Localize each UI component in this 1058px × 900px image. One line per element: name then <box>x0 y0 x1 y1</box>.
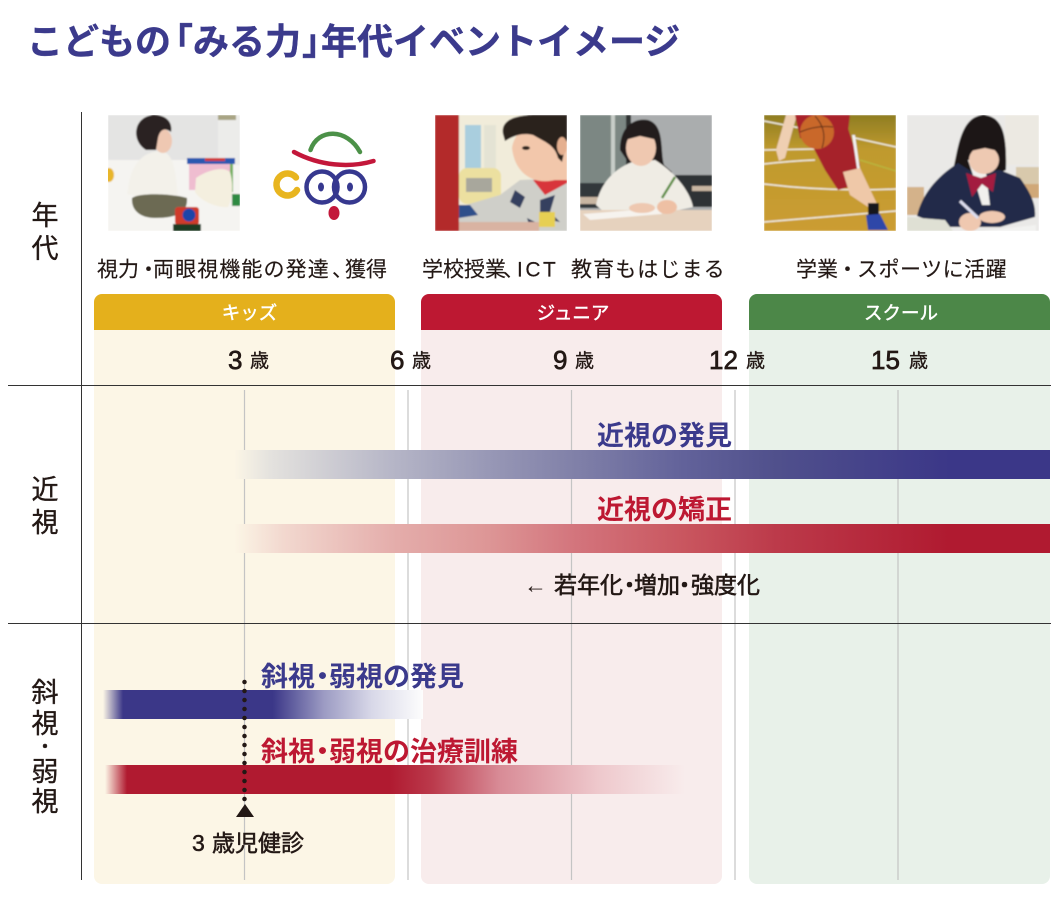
age scale: 歳 <box>412 350 431 372</box>
annotation: younger onset, increase, intensification: 増加 <box>634 572 680 598</box>
row label: strabismus and amblyopia <box>32 678 58 817</box>
icon: coo logo <box>276 134 374 220</box>
caption: kids: 両眼視機能の発達 <box>153 258 330 282</box>
kids header: キッズ <box>222 302 277 324</box>
school header: スクール <box>864 302 938 324</box>
caption: kids: 獲得 <box>345 258 387 282</box>
caption: school: ・ <box>837 258 858 282</box>
bar: strabismus and amblyopia treatment: 弱視の治療訓練 <box>329 737 518 767</box>
panel: kids <box>94 294 395 884</box>
marker: 3-year-old checkup <box>192 682 304 856</box>
row label: age: 代 <box>32 234 58 264</box>
age scale: 15 <box>871 345 900 375</box>
panel: junior <box>421 294 722 884</box>
row label: age <box>32 201 58 264</box>
title: みる力 <box>193 21 301 62</box>
marker: 3-year-old checkup: 歳児健診 <box>212 830 304 856</box>
bar: strabismus and amblyopia treatment: ・ <box>309 737 336 767</box>
age scale <box>228 345 928 375</box>
panel: school <box>749 294 1050 884</box>
junior header: ジュニア <box>537 302 609 324</box>
age scale: 6 <box>390 345 404 375</box>
caption: junior: ICT <box>517 258 558 282</box>
bar: strabismus and amblyopia discovery <box>103 662 464 719</box>
age scale: 12 <box>709 345 738 375</box>
row label: myopia: 近 <box>32 475 58 505</box>
caption: school: 学業 <box>796 258 838 282</box>
bar: myopia discovery <box>234 421 1050 479</box>
row label: strabismus and amblyopia: 視 <box>32 787 58 817</box>
row label: strabismus and amblyopia: 弱 <box>32 757 58 787</box>
bar: strabismus and amblyopia discovery: 斜視 <box>261 662 315 692</box>
bar: strabismus and amblyopia treatment: 斜視 <box>261 737 315 767</box>
junior header <box>421 294 722 330</box>
photo: girl at desk <box>580 115 712 231</box>
caption: junior: 学校授業 <box>422 258 506 282</box>
row label: myopia: 視 <box>32 508 58 538</box>
caption: kids: 視力 <box>97 258 139 282</box>
caption: school: スポーツに活躍 <box>857 258 1007 282</box>
bar: strabismus and amblyopia treatment <box>105 737 685 794</box>
title: 」 <box>302 21 338 62</box>
row label: strabismus and amblyopia: 斜 <box>32 678 58 708</box>
caption: kids: ・ <box>138 258 159 282</box>
title: こどもの <box>27 21 171 62</box>
photo: student writing <box>907 115 1039 231</box>
title: 「 <box>157 21 193 62</box>
age scale: 3 <box>228 345 242 375</box>
row label: strabismus and amblyopia: ・ <box>35 737 55 758</box>
row label: strabismus and amblyopia: 視 <box>32 709 58 739</box>
caption: kids: 、 <box>332 258 353 282</box>
bar: myopia correction: 近視の矯正 <box>597 495 732 525</box>
annotation: younger onset, increase, intensification: ← <box>524 572 547 598</box>
bar: strabismus and amblyopia discovery: ・ <box>309 662 336 692</box>
annotation: younger onset, increase, intensification: 若年化 <box>554 572 623 598</box>
kids header <box>94 294 395 330</box>
caption: junior: 、 <box>503 258 524 282</box>
age scale: 9 <box>553 345 567 375</box>
bar: strabismus and amblyopia discovery: 弱視の発見 <box>329 662 464 692</box>
photo: boy at computer <box>435 115 567 231</box>
bar: myopia discovery: 近視の発見 <box>597 421 732 451</box>
age scale: 歳 <box>746 350 765 372</box>
marker: 3-year-old checkup: 3 <box>192 830 205 856</box>
title: 年代イベントイメージ <box>321 21 680 62</box>
row label: age: 年 <box>32 201 58 231</box>
bar: myopia correction <box>234 495 1050 553</box>
age scale: 歳 <box>250 350 269 372</box>
annotation: younger onset, increase, intensification: 強度化 <box>691 572 760 598</box>
age scale: 歳 <box>909 350 928 372</box>
row label: myopia <box>32 475 58 538</box>
caption: junior: 教育もはじまる <box>571 258 726 282</box>
age scale: 歳 <box>575 350 594 372</box>
school header <box>749 294 1050 330</box>
photo: basketball player <box>764 115 896 231</box>
annotation: younger onset, increase, intensification: ・ <box>673 572 696 598</box>
photo: baby with toys <box>104 115 240 231</box>
annotation: younger onset, increase, intensification: ・ <box>618 572 641 598</box>
